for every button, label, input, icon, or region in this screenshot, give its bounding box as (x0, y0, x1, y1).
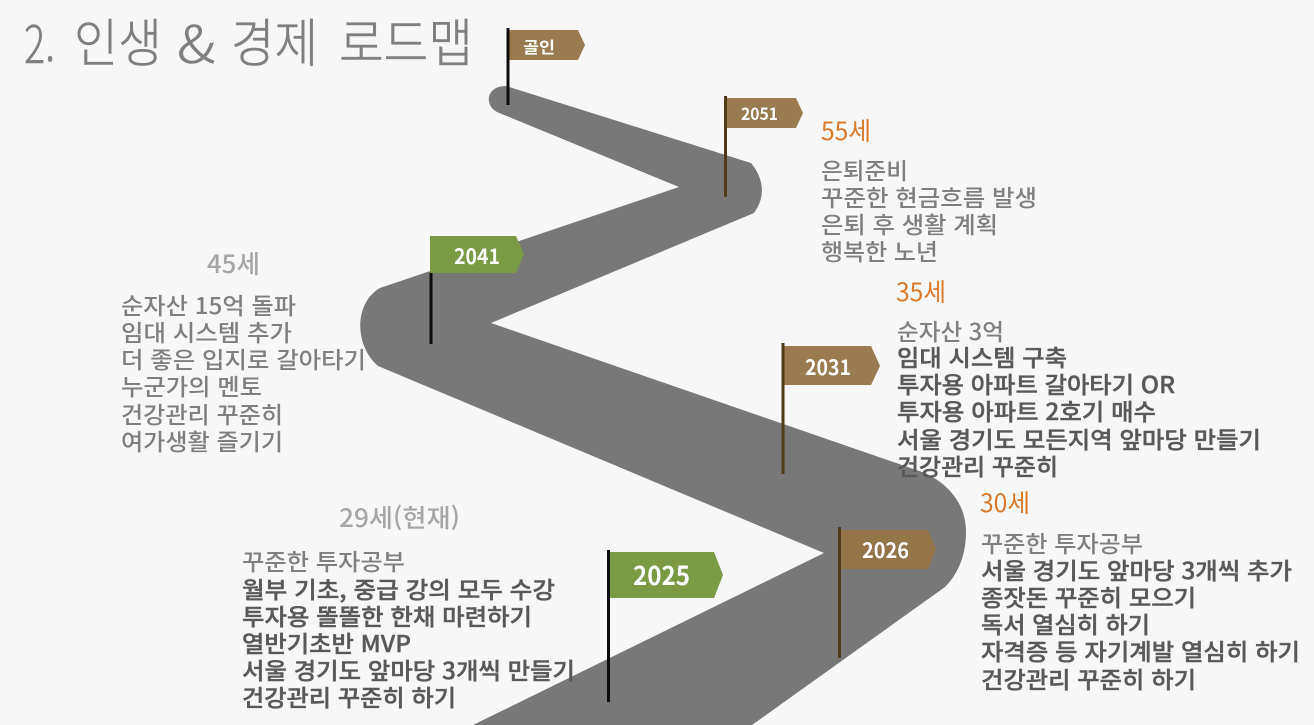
text block: age 45: 더 좋은 입지로 갈아타기 (121, 341, 366, 375)
flag: 2051 (724, 96, 803, 197)
text block: age 35: 투자용 아파트 2호기 매수 (897, 393, 1156, 427)
title: & (177, 3, 215, 78)
text block: age 55: 은퇴 후 생활 계획 (821, 206, 998, 240)
text block: age 45: 여가생활 즐기기 (121, 423, 283, 457)
text block: age 35 (896, 273, 1261, 482)
text block: age 29 (current): 29세(현재) (339, 499, 460, 535)
flag: 2051: 2051 (741, 100, 778, 125)
text block: age 29 (current): 건강관리 꾸준히 하기 (242, 679, 456, 713)
flag: 2041 (430, 236, 524, 344)
text block: age 30: 꾸준한 투자공부 (981, 525, 1143, 559)
text block: age 29 (current): 투자용 똘똘한 한채 마련하기 (242, 598, 532, 632)
text block: age 29 (current): 서울 경기도 앞마당 3개씩 만들기 (242, 652, 575, 686)
text block: age 30: 서울 경기도 앞마당 3개씩 추가 (981, 552, 1292, 586)
title: 인생 (74, 2, 162, 77)
title (24, 2, 473, 78)
text block: age 45 (121, 245, 366, 457)
text block: age 29 (current): 꾸준한 투자공부 (242, 543, 405, 577)
text block: age 55: 행복한 노년 (821, 233, 938, 267)
text block: age 55: 꾸준한 현금흐름 발생 (821, 179, 1037, 213)
flag: goal (506, 28, 585, 105)
text block: age 30: 독서 열심히 하기 (981, 606, 1150, 640)
text block: age 55 (821, 112, 1037, 267)
flag: 2041: 2041 (454, 241, 500, 271)
text block: age 35: 투자용 아파트 갈아타기 OR (897, 366, 1175, 400)
winding road (360, 86, 966, 725)
text block: age 35: 건강관리 꾸준히 (897, 448, 1058, 482)
title: 2. (24, 3, 55, 78)
flag: 2026: 2026 (862, 535, 909, 565)
flag: 2025: 2025 (633, 556, 690, 593)
text block: age 45: 건강관리 꾸준히 (121, 396, 283, 430)
flag: 2026 (838, 527, 936, 658)
flag: goal: 골인 (523, 34, 555, 58)
text block: age 55: 은퇴준비 (821, 152, 908, 186)
text block: age 29 (current): 월부 기초, 중급 강의 모두 수강 (242, 571, 555, 605)
text block: age 30 (980, 484, 1300, 695)
text block: age 45: 45세 (207, 245, 260, 281)
text block: age 29 (current): 열반기초반 MVP (242, 625, 411, 659)
text block: age 29 (current) (242, 499, 575, 713)
flag: 2031: 2031 (805, 352, 851, 382)
flag: 2025 (607, 550, 723, 702)
flag: 2031 (782, 343, 880, 474)
text block: age 30: 종잣돈 꾸준히 모으기 (981, 579, 1196, 613)
title: 경제 (231, 2, 318, 77)
text block: age 35: 임대 시스템 구축 (897, 339, 1067, 373)
text block: age 30: 건강관리 꾸준히 하기 (981, 661, 1196, 695)
title: 로드맵 (339, 2, 473, 77)
text block: age 45: 임대 시스템 추가 (121, 314, 292, 348)
text block: age 30: 자격증 등 자기계발 열심히 하기 (981, 633, 1300, 667)
text block: age 55: 55세 (821, 112, 871, 148)
text block: age 45: 누군가의 멘토 (121, 368, 262, 402)
text block: age 45: 순자산 15억 돌파 (121, 287, 296, 321)
text block: age 35: 35세 (896, 273, 946, 309)
text block: age 35: 서울 경기도 모든지역 앞마당 만들기 (897, 421, 1261, 455)
text block: age 30: 30세 (980, 484, 1030, 520)
text block: age 35: 순자산 3억 (897, 313, 1004, 347)
